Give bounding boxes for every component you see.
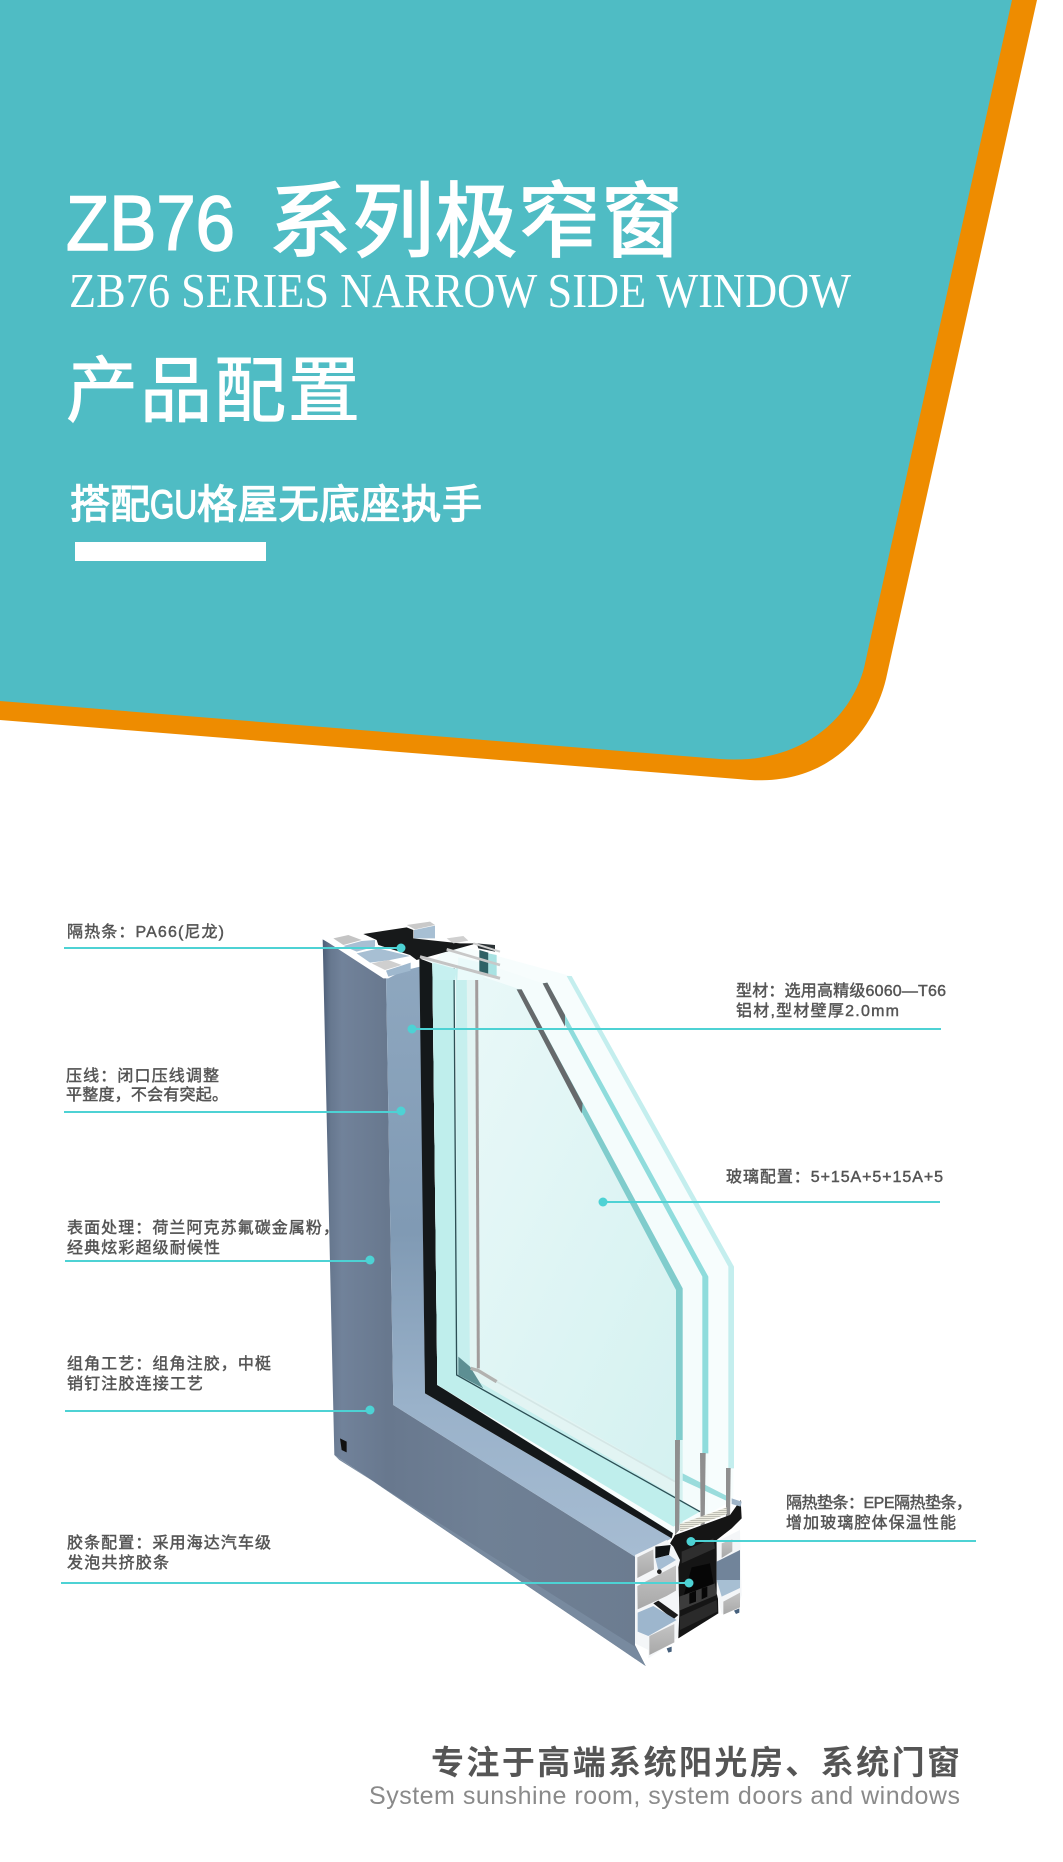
back glass pane [432,945,733,1533]
title [66,177,683,268]
frame reveal [386,967,672,1557]
footer slogan: 专注于高端系统阳光房、系统门窗 [431,1744,960,1781]
callout: 胶条配置: 发泡共挤胶条 [67,1554,169,1572]
back reflection stripe [683,1473,728,1502]
insulation strip [680,1507,727,1532]
callout: 表面处理: 表面处理：荷兰阿克苏氟碳金属粉， [67,1219,339,1237]
callout: 压线: 压线：闭口压线调整 [66,1067,219,1085]
white bar [75,542,266,561]
right aluminium section [717,1530,742,1614]
callout: 型材: 型材：选用高精级6060—T66 [736,982,946,1000]
heading: product configuration: 产品配置 [66,352,360,432]
top profile section [323,922,500,980]
pane spacers [675,1440,731,1535]
callout: 型材: 铝材,型材壁厚2.0mm [736,1001,899,1020]
sub-heading: handle: 搭配 [70,483,150,527]
callout: 表面处理: 经典炫彩超级耐候性 [67,1239,220,1257]
footer English slogan: System sunshine room, system doors and windows [369,1782,960,1810]
frame outer face [323,939,646,1666]
title: 系列极窄窗 [269,177,683,268]
callout: 胶条配置 [61,1534,694,1588]
black gasket [419,958,675,1538]
callout: 隔热条: 隔热条：PA66(尼龙) [67,923,224,941]
callout: 隔热垫条: 隔热垫条：EPE隔热垫条， [786,1494,972,1512]
callout: 组角工艺: 销钉注胶连接工艺 [67,1375,203,1393]
callout: 隔热条 [64,923,406,952]
callout: 隔热垫条: 增加玻璃腔体保温性能 [786,1514,956,1532]
callout: 表面处理 [65,1219,374,1264]
callout: 组角工艺 [65,1355,374,1414]
frame lower lip [334,1455,646,1666]
callout: 隔热垫条 [686,1494,976,1546]
front glass pane [418,955,683,1527]
sub-heading: handle: 格屋无底座执手 [197,483,482,527]
callout: 胶条配置: 胶条配置：采用海达汽车级 [67,1534,271,1552]
pane edge strips [517,976,734,1468]
sub-heading: handle: GU [150,483,197,527]
callout: 压线: 平整度，不会有突起。 [66,1086,228,1104]
middle glass pane [432,950,708,1520]
header panel [0,0,1037,780]
callout: 压线 [64,1067,406,1116]
callout: 玻璃配置: 玻璃配置：5+15A+5+15A+5 [726,1168,943,1186]
sub-heading: handle [70,483,482,527]
drain hole [340,1438,347,1452]
left aluminium section [635,1540,680,1658]
window product illustration [323,922,742,1666]
thermal break [670,1500,742,1638]
callout: 组角工艺: 组角工艺：组角注胶，中梃 [67,1355,271,1373]
title: ZB76 [66,179,235,267]
glass edge bands [432,963,700,1527]
bottom profile section [635,1440,742,1658]
callout: 型材 [408,982,946,1034]
subtitle: ZB76 SERIES NARROW SIDE WINDOW [69,263,852,318]
callout: 玻璃配置 [598,1168,943,1206]
